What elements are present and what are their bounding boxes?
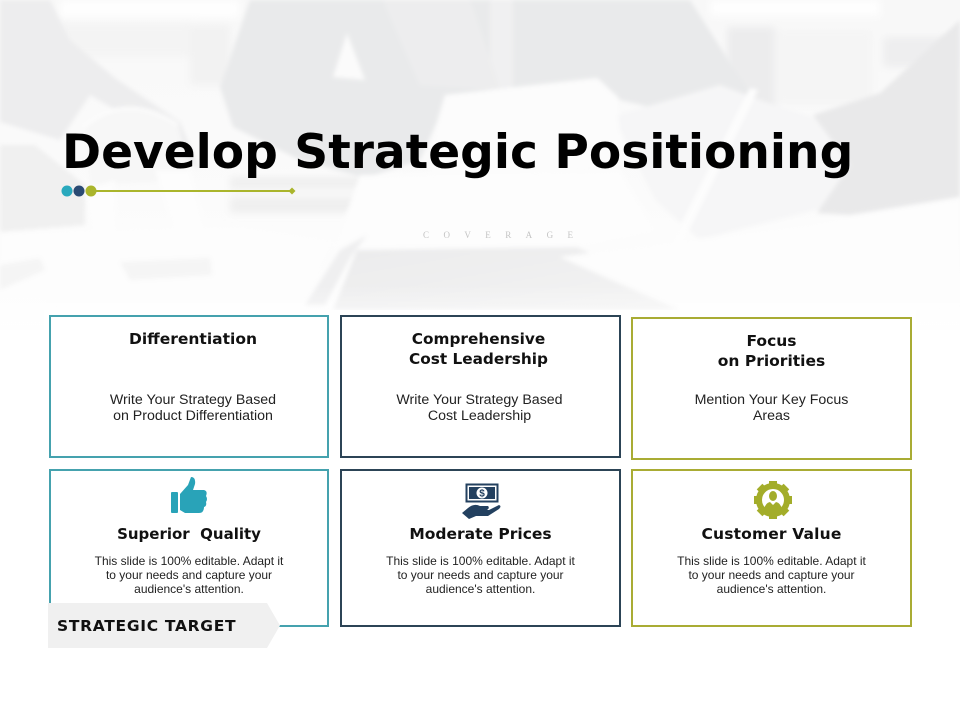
strategic target tag [48,603,280,648]
body text: audience's attention. [134,582,244,596]
panel: Comprehensive Cost Leadership [340,315,621,458]
body text: on Product Differentiation [113,408,273,424]
heading: Cost Leadership [409,350,548,368]
ring and fingers [85,107,192,185]
body text: Mention Your Key Focus [695,392,848,408]
icon: hand holding money: $ [479,488,485,500]
paper [333,170,657,250]
body text [94,554,284,596]
heading [718,332,825,370]
cuff and hands [430,78,625,180]
title: Develop Strategic Positioning [62,125,853,180]
body text: Write Your Strategy Based [110,392,276,408]
photo caption smudge: COVERAGE [423,230,574,240]
body text [396,392,563,424]
document right [560,197,960,315]
icon: thumbs up [171,477,207,513]
title decoration: dots and line [62,186,296,196]
body text: This slide is 100% editable. Adapt it [677,554,866,568]
body text: to your needs and capture your [688,568,855,582]
icon: hand holding money [462,484,500,519]
central suit [220,0,760,178]
panel: Customer Value [631,469,912,627]
body text: Areas [753,408,790,424]
body text [677,554,866,596]
heading: Differentiation [129,330,257,348]
panel: Differentiation [49,315,329,458]
pen [670,88,758,248]
icon: gear with person [754,481,792,519]
left sleeve [0,0,200,170]
body text: This slide is 100% editable. Adapt it [95,554,283,568]
panel: Superior Quality [49,469,329,627]
body text: to your needs and capture your [397,568,564,582]
lower-left document [0,225,335,310]
body text: to your needs and capture your [106,568,272,582]
heading [409,330,548,368]
heading: Customer Value [702,524,841,542]
body text [386,554,575,596]
heading: Superior Quality [117,524,261,542]
panel: Focus on Priorities [631,317,912,460]
body text: audience's attention. [717,582,826,596]
body text: Write Your Strategy Based [396,392,563,408]
strategic target tag: STRATEGIC TARGET [57,617,236,635]
body text [110,392,276,424]
heading: Comprehensive [412,330,545,348]
white panel behind cards [44,310,916,635]
heading: on Priorities [718,352,825,370]
body text: Cost Leadership [428,408,531,424]
right sleeve [813,20,960,215]
heading: Focus [746,332,797,350]
body text: audience's attention. [426,582,535,596]
background photo [0,0,960,308]
heading: Moderate Prices [409,524,552,542]
body text [695,392,848,424]
tablet [333,247,693,310]
body text: This slide is 100% editable. Adapt it [386,554,575,568]
panel: Moderate Prices [340,469,621,627]
